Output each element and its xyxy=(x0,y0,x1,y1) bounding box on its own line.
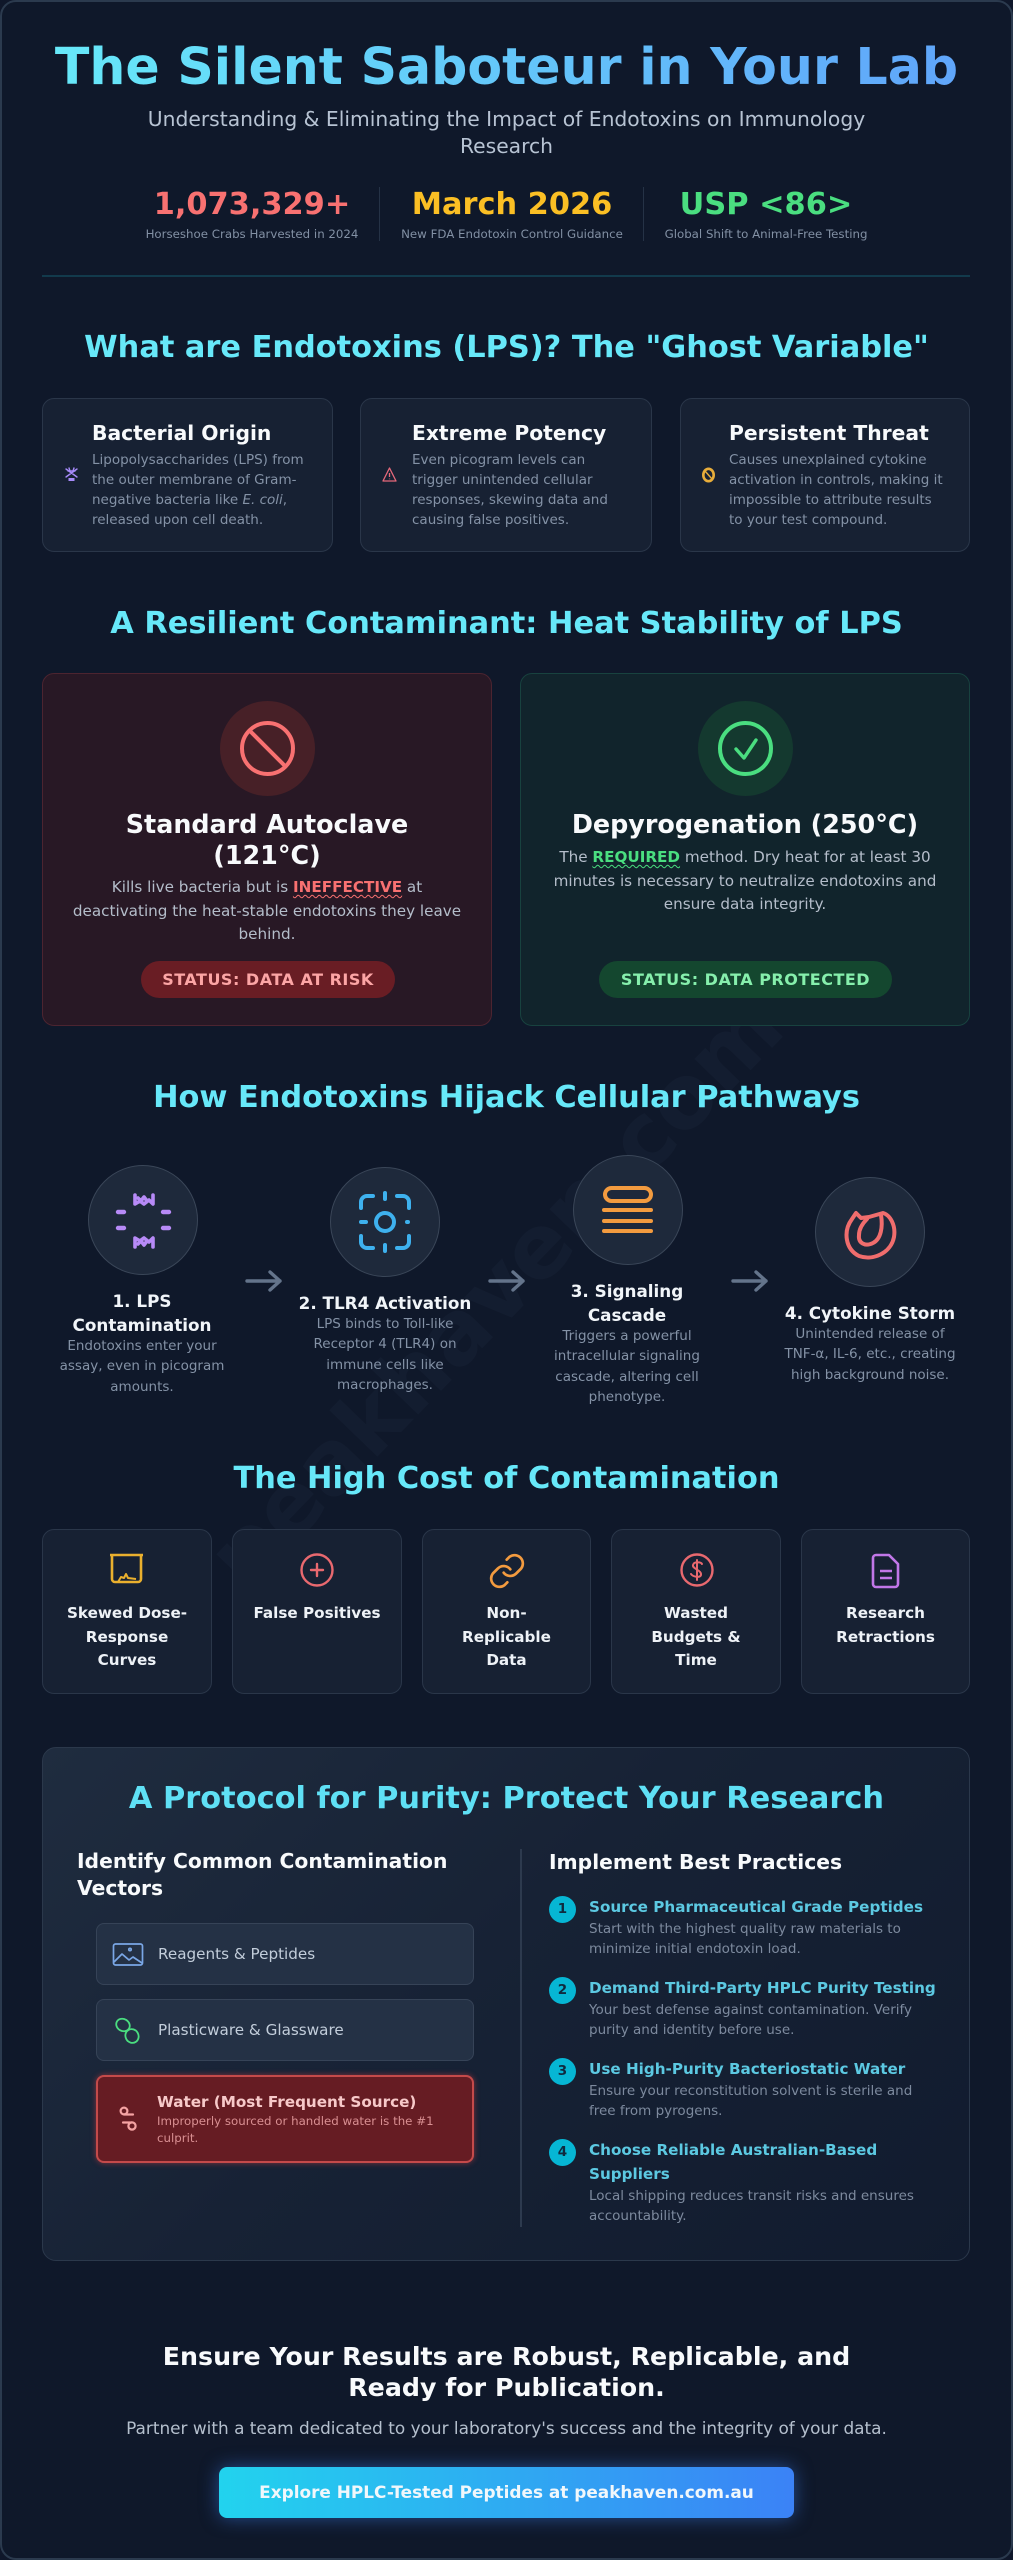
panel: extreme potency: causing false positives. xyxy=(412,512,569,528)
panel: bacterial origin: released upon cell death. xyxy=(92,512,263,528)
status pill: STATUS: DATA AT RISK xyxy=(162,970,374,989)
subtitle: Understanding & Eliminating the Impact of Endotoxins on Immunology xyxy=(148,107,865,131)
text: Your best defense against contamination. Verify xyxy=(589,2002,912,2018)
label: False Positives xyxy=(253,1604,381,1622)
text: practice 1: Source Pharmaceutical Grade Peptides xyxy=(589,1898,923,1916)
practice 1 xyxy=(549,1896,923,1957)
text: step 3 xyxy=(571,1281,683,1325)
text: 3 xyxy=(558,2063,567,2079)
practice 4 xyxy=(549,2139,914,2224)
panel: standard autoclave: deactivating the heat-stable endotoxins they leave xyxy=(73,902,461,920)
subtitle: Research xyxy=(460,134,553,158)
card: non-replicable xyxy=(422,1529,591,1694)
step 4: Unintended release of xyxy=(795,1326,945,1342)
panel: bacterial origin xyxy=(42,398,333,552)
label: Skewed Dose- xyxy=(67,1604,187,1622)
cta heading: Ready for Publication. xyxy=(348,2373,665,2402)
label xyxy=(67,1604,187,1669)
panel: bacterial origin: Lipopolysaccharides (LPS) from xyxy=(92,452,304,468)
text: autoclave xyxy=(126,809,408,870)
panel: persistent threat: impossible to attribute results xyxy=(729,492,932,508)
text: minimize initial endotoxin load. xyxy=(589,1941,801,1957)
step 2: LPS binds to Toll-like xyxy=(317,1316,453,1332)
step 1 xyxy=(60,1165,224,1395)
icon: storm xyxy=(815,1177,925,1287)
card: wasted budgets xyxy=(611,1529,781,1694)
panel: bacterial origin: the outer membrane of Gram- xyxy=(92,472,296,488)
icon: cascade xyxy=(573,1155,683,1265)
stat: crabs: Horseshoe Crabs Harvested in 2024 xyxy=(146,227,358,241)
step 2: Receptor 4 (TLR4) on xyxy=(313,1336,457,1352)
panel: extreme potency: Even picogram levels can xyxy=(412,452,585,468)
panel: extreme potency: trigger unintended cellular xyxy=(412,472,593,488)
panel: standard autoclave: Kills live bacteria but is INEFFECTIVE at xyxy=(112,878,422,896)
stat: USP: Global Shift to Animal-Free Testing xyxy=(665,227,867,241)
heading: what are endotoxins: What are Endotoxins (LPS)? The "Ghost Variable" xyxy=(84,330,929,365)
label: Replicable xyxy=(462,1628,551,1646)
status pill xyxy=(141,961,395,998)
practice 3 xyxy=(549,2058,912,2119)
text: practice 4: Choose Reliable Australian-Based xyxy=(589,2141,877,2159)
icon: LPS xyxy=(88,1165,198,1275)
panel: standard autoclave: behind. xyxy=(239,925,295,943)
text: step 4: 4. Cytokine Storm xyxy=(785,1303,955,1323)
label: Time xyxy=(675,1651,717,1669)
arrow 2 xyxy=(488,1270,525,1292)
text: Ensure your reconstitution solvent is sterile and xyxy=(589,2083,912,2099)
label: Wasted xyxy=(664,1604,728,1622)
text: step 1 xyxy=(73,1291,211,1335)
text: practice 2: Demand Third-Party HPLC Purity Testing xyxy=(589,1979,936,1997)
text: step 1: Contamination xyxy=(73,1315,211,1335)
heading: heat stability: A Resilient Contaminant: Heat Stability of LPS xyxy=(110,606,903,641)
label: Response xyxy=(86,1628,168,1646)
text: step 3: Cascade xyxy=(588,1305,666,1325)
stat: FDA xyxy=(401,187,623,241)
text: bacterial origin: Bacterial Origin xyxy=(92,421,271,445)
vector: plasticware xyxy=(96,1999,474,2061)
text: Local shipping reduces transit risks and ensures xyxy=(589,2188,914,2204)
panel: persistent threat: activation in controls, making it xyxy=(729,472,943,488)
step 1: Endotoxins enter your xyxy=(67,1338,217,1354)
step 4 xyxy=(784,1177,956,1383)
cta text: Partner with a team dedicated to your laboratory's success and the integrity of your data. xyxy=(126,2418,887,2438)
icon: bacterium xyxy=(65,467,78,481)
label xyxy=(836,1604,935,1646)
text: extreme potency: Extreme Potency xyxy=(412,421,606,445)
text: autoclave: (121°C) xyxy=(213,840,321,870)
step 3: intracellular signaling xyxy=(554,1348,700,1364)
panel: standard autoclave xyxy=(42,673,492,1026)
heading: pathways: How Endotoxins Hijack Cellular Pathways xyxy=(153,1080,860,1115)
text: 2 xyxy=(558,1982,567,1998)
panel: depyrogenation: minutes is necessary to neutralize endotoxins and xyxy=(554,872,936,890)
icon: chart xyxy=(110,1554,143,1584)
panel: extreme potency xyxy=(360,398,652,552)
icon: dollar xyxy=(680,1553,714,1587)
cta heading xyxy=(163,2342,850,2402)
step 2: immune cells like xyxy=(326,1357,444,1373)
label: Budgets & xyxy=(651,1628,741,1646)
stat: crabs: 1,073,329+ xyxy=(154,187,350,222)
arrow 1 xyxy=(245,1270,282,1292)
arrow 3 xyxy=(731,1270,768,1292)
panel: depyrogenation: ensure data integrity. xyxy=(664,895,826,913)
text: practice 3: Use High-Purity Bacteriostatic Water xyxy=(589,2060,905,2078)
status pill xyxy=(599,961,892,998)
icon: threat xyxy=(702,468,715,482)
text: step 1: 1. LPS xyxy=(112,1291,171,1311)
panel: depyrogenation xyxy=(520,673,970,1026)
panel: bacterial origin: negative bacteria like E. coli, xyxy=(92,492,287,508)
stats row xyxy=(146,187,867,241)
subtitle xyxy=(148,107,865,158)
text: step 2: 2. TLR4 Activation xyxy=(299,1293,471,1313)
step 3: cascade, altering cell xyxy=(555,1369,699,1385)
text: water: Water (Most Frequent Source) xyxy=(157,2093,416,2111)
icon: glassware xyxy=(115,2018,140,2044)
label: Curves xyxy=(98,1651,156,1669)
label: Plasticware & Glassware xyxy=(158,2021,344,2039)
step 2: macrophages. xyxy=(337,1377,433,1393)
label: Non- xyxy=(486,1604,527,1622)
heading: protocol: A Protocol for Purity: Protect Your Research xyxy=(129,1781,884,1816)
step 2 xyxy=(299,1167,471,1393)
stat: crabs xyxy=(146,187,358,241)
icon: check xyxy=(698,701,793,796)
text: step 3: 3. Signaling xyxy=(571,1281,683,1301)
step 4: high background noise. xyxy=(791,1367,949,1383)
watermark: peakhaven.com.au xyxy=(187,863,911,1608)
left heading: Vectors xyxy=(77,1876,163,1900)
icon: prohibited xyxy=(220,701,315,796)
vector: water xyxy=(96,2075,474,2163)
left heading: Identify Common Contamination xyxy=(77,1849,447,1873)
cta button xyxy=(219,2467,794,2518)
card: retractions xyxy=(801,1529,970,1694)
text: 1 xyxy=(558,1901,567,1917)
icon: water xyxy=(120,2106,137,2131)
vector: water: Improperly sourced or handled water is the #1 xyxy=(157,2114,434,2128)
panel: persistent threat xyxy=(680,398,970,552)
divider xyxy=(520,1849,522,2227)
left heading xyxy=(77,1849,447,1900)
panel: protocol xyxy=(42,1747,970,2261)
text: 4 xyxy=(558,2144,567,2160)
stat: USP xyxy=(665,187,867,241)
vector: reagents xyxy=(96,1923,474,1985)
text: Start with the highest quality raw materials to xyxy=(589,1921,901,1937)
icon: link xyxy=(490,1554,524,1588)
cta button: Explore HPLC-Tested Peptides at peakhaven.com.au xyxy=(259,2482,754,2502)
label xyxy=(651,1604,741,1669)
panel: extreme potency: responses, skewing data and xyxy=(412,492,608,508)
text: practice 4: Suppliers xyxy=(589,2164,670,2182)
panel: persistent threat: to your test compound. xyxy=(729,512,887,528)
icon: plus circle xyxy=(300,1553,334,1587)
label: Data xyxy=(486,1651,527,1669)
text: autoclave: Standard Autoclave xyxy=(126,809,408,839)
step 3: phenotype. xyxy=(589,1389,665,1405)
card: skewed curves xyxy=(42,1529,212,1694)
title: The Silent Saboteur in Your Lab xyxy=(55,37,958,96)
step 1: assay, even in picogram xyxy=(60,1358,224,1374)
text: depyrogenation: Depyrogenation (250°C) xyxy=(572,809,918,839)
practice 2 xyxy=(549,1977,936,2038)
right heading: Implement Best Practices xyxy=(549,1850,842,1874)
step 1: amounts. xyxy=(110,1379,174,1395)
vector: water: culprit. xyxy=(157,2131,198,2145)
panel: depyrogenation: The REQUIRED method. Dry heat for at least 30 xyxy=(559,848,931,866)
text: persistent threat: Persistent Threat xyxy=(729,421,929,445)
step 3: Triggers a powerful xyxy=(562,1328,692,1344)
label: Retractions xyxy=(836,1628,935,1646)
text: purity and identity before use. xyxy=(589,2022,794,2038)
text: accountability. xyxy=(589,2208,687,2224)
stat: FDA: March 2026 xyxy=(412,187,612,222)
card: false positives xyxy=(232,1529,402,1694)
cta heading: Ensure Your Results are Robust, Replicable, and xyxy=(163,2342,850,2371)
text: free from pyrogens. xyxy=(589,2103,722,2119)
step 4: TNF-α, IL-6, etc., creating xyxy=(784,1346,956,1362)
step 3 xyxy=(554,1155,700,1405)
text: practice 4 xyxy=(589,2141,877,2182)
status pill: STATUS: DATA PROTECTED xyxy=(621,970,870,989)
stat: USP: USP <86> xyxy=(680,187,852,222)
stat: FDA: New FDA Endotoxin Control Guidance xyxy=(401,227,623,241)
icon: receptor xyxy=(330,1167,440,1277)
label xyxy=(462,1604,551,1669)
icon: document xyxy=(872,1554,900,1588)
icon: warning xyxy=(382,467,397,482)
label: Reagents & Peptides xyxy=(158,1945,315,1963)
heading: cost: The High Cost of Contamination xyxy=(234,1461,779,1496)
label: Research xyxy=(846,1604,925,1622)
panel: persistent threat: Causes unexplained cytokine xyxy=(729,452,927,468)
icon: image xyxy=(112,1943,144,1966)
